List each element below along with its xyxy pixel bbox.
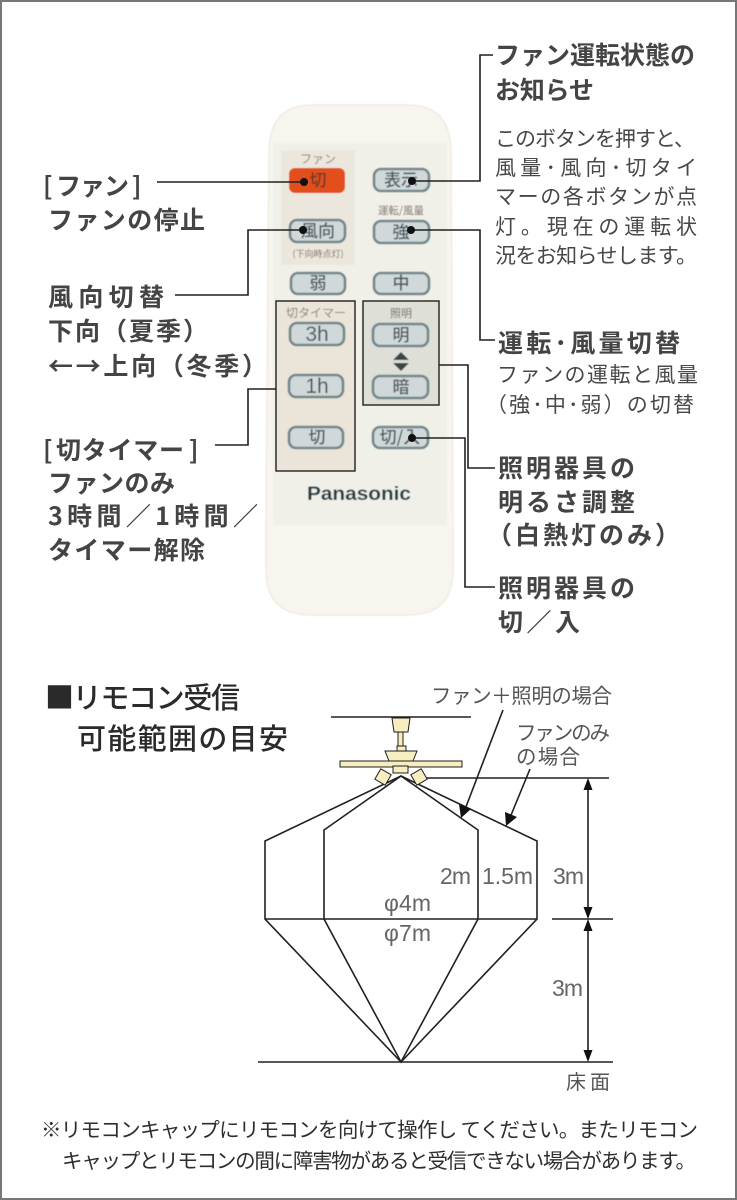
footnote: ※リモコンキャップにリモコンを向けて操作し てください。またリモコン <box>41 1113 698 1143</box>
dimension values: 3m <box>553 863 584 889</box>
text: status description <box>495 123 697 270</box>
label: operation and airflow: 運転･風量切替 <box>498 324 680 360</box>
ceiling fan <box>331 717 471 785</box>
heading: reception range: ■リモコン受信 <box>45 675 240 717</box>
label: status notice <box>495 36 695 107</box>
label: light on off: 照明器具の <box>498 569 635 605</box>
button: display: 表示 <box>384 166 418 191</box>
button: light on off: 切/入 <box>380 423 420 448</box>
label: fan stop <box>43 167 205 237</box>
remote control <box>266 105 453 615</box>
dimension values <box>384 863 610 1095</box>
label: direction switch: ←→上向（冬季） <box>48 347 267 383</box>
light buttons: 照明 <box>390 305 412 321</box>
label: status notice: お知らせ <box>495 71 594 107</box>
label: direction switch: 風向切替 <box>48 278 164 314</box>
Panasonic logo: Panasonic <box>307 484 411 505</box>
label: direction switch <box>48 278 267 383</box>
label: fan stop: ファンの停止 <box>48 201 205 237</box>
footnote <box>41 1113 698 1174</box>
label: timer: 切タイマー <box>56 431 184 467</box>
label: operation and airflow: （強･中･弱）の切替 <box>486 389 694 419</box>
label: timer: タイマー解除 <box>48 531 205 567</box>
footnote: キャップとリモコンの間に障害物があると受信できない場合があります。 <box>62 1144 696 1174</box>
button: weak <box>291 269 345 294</box>
label: fan only <box>516 716 610 770</box>
dimension values: φ7m <box>384 920 431 946</box>
label: light on off <box>498 569 635 639</box>
label: fan only: ファンのみ <box>516 716 610 746</box>
label: timer: ] <box>189 431 198 467</box>
button: direction <box>290 217 345 260</box>
light buttons: 明 <box>392 321 410 346</box>
timer buttons <box>286 304 346 448</box>
button: fan off: ファン <box>300 150 336 167</box>
label: fan stop: [ <box>43 167 52 203</box>
button: weak: 弱 <box>310 269 326 294</box>
label: operation and airflow <box>486 324 698 419</box>
text: status description: 風量･風向･切タイ <box>495 152 697 182</box>
text: status description: このボタンを押すと、 <box>495 123 695 153</box>
text: status description: 況をお知らせします。 <box>495 240 697 270</box>
button: display <box>374 166 429 191</box>
dimension values: 3m <box>552 975 583 1001</box>
button: fan off <box>289 150 345 193</box>
button: fan off: 切 <box>310 166 326 191</box>
button: medium: 中 <box>392 269 410 294</box>
light buttons <box>373 305 428 398</box>
label: fan only: の場合 <box>516 740 580 770</box>
label: direction switch: 下向（夏季） <box>48 312 208 348</box>
button: strong: 運転/風量 <box>378 203 425 218</box>
dimension arrows <box>584 778 592 1062</box>
label: timer: [ <box>43 431 52 467</box>
button: medium <box>374 269 429 294</box>
dimension values: 床面 <box>566 1066 610 1095</box>
button: strong <box>374 203 429 243</box>
label: timer: ファンのみ <box>48 464 175 500</box>
label: fan stop: ] <box>132 167 141 203</box>
dimension values: φ4m <box>384 890 431 916</box>
label: brightness: 照明器具の <box>498 449 635 485</box>
text: status description: マーの各ボタンが点 <box>495 181 697 211</box>
light buttons: 暗 <box>392 373 410 398</box>
label: status notice: ファン運転状態の <box>495 36 695 72</box>
dimension values: 2m <box>440 863 471 889</box>
button: direction: 風向 <box>301 217 335 242</box>
button: direction: (下向時点灯) <box>292 247 344 260</box>
label: brightness: 明るさ調整 <box>498 483 635 519</box>
text: status description: 灯。現在の運転状 <box>495 211 697 241</box>
timer buttons: 3h <box>305 323 329 346</box>
timer buttons: 切タイマー <box>286 304 346 321</box>
dimension values: 1.5m <box>482 863 533 889</box>
leader lines <box>157 55 495 587</box>
label: timer <box>43 431 258 567</box>
timer buttons: 1h <box>305 375 329 398</box>
label: operation and airflow: ファンの運転と風量 <box>497 359 698 389</box>
label: fan and light: ファン＋照明の場合 <box>431 679 612 709</box>
label: fan stop: ファン <box>56 167 129 203</box>
label: timer: 3時間／1時間／ <box>48 497 258 533</box>
range diagram <box>258 776 613 1062</box>
timer buttons: 切 <box>308 423 326 448</box>
label: brightness <box>487 449 680 552</box>
pointer arrows <box>459 710 530 826</box>
button: strong: 強 <box>392 218 410 243</box>
label: light on off: 切／入 <box>498 603 580 639</box>
heading: reception range <box>45 675 288 758</box>
heading: reception range: 可能範囲の目安 <box>77 716 288 758</box>
label: brightness: （白熱灯のみ） <box>487 516 680 552</box>
